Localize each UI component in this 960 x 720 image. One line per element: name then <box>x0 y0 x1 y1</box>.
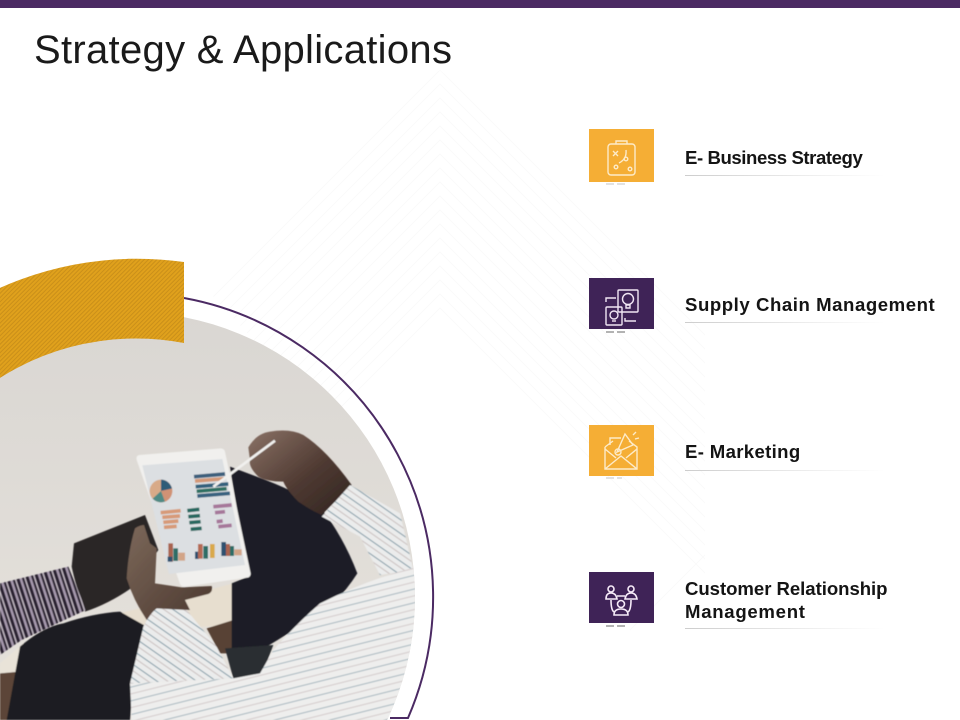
trousers <box>7 467 357 720</box>
item: e-marketing <box>589 425 654 479</box>
baseboard and carpet <box>0 583 233 720</box>
tablet charts <box>150 474 242 562</box>
top bar <box>0 0 960 8</box>
gold arc <box>0 259 184 400</box>
icon: envelope and megaphone <box>589 425 654 479</box>
icon: ideas exchange <box>589 278 654 333</box>
label: customer relationship management: Customer Relationship <box>685 578 887 599</box>
icon: connected people <box>589 572 654 627</box>
label: e-marketing: E- Marketing <box>685 441 801 462</box>
photo: man using tablet <box>0 300 420 720</box>
label: customer relationship management: Management <box>685 601 806 622</box>
hands and stylus <box>127 431 352 620</box>
left striped sleeve <box>0 567 86 655</box>
item: customer relationship management <box>589 572 654 627</box>
item: e-business strategy <box>589 129 654 185</box>
tablet <box>136 448 251 587</box>
striped shirt <box>130 485 417 720</box>
label: e-business strategy: E- Business Strategy <box>685 147 862 168</box>
photo circle with outline and gold arc <box>0 258 434 720</box>
circular outline <box>184 298 433 718</box>
item: supply chain management <box>589 278 654 333</box>
label: customer relationship management <box>685 578 887 622</box>
title: Strategy & Applications <box>34 28 452 72</box>
label: supply chain management: Supply Chain Management <box>685 294 935 315</box>
icon: clipboard <box>589 129 654 185</box>
